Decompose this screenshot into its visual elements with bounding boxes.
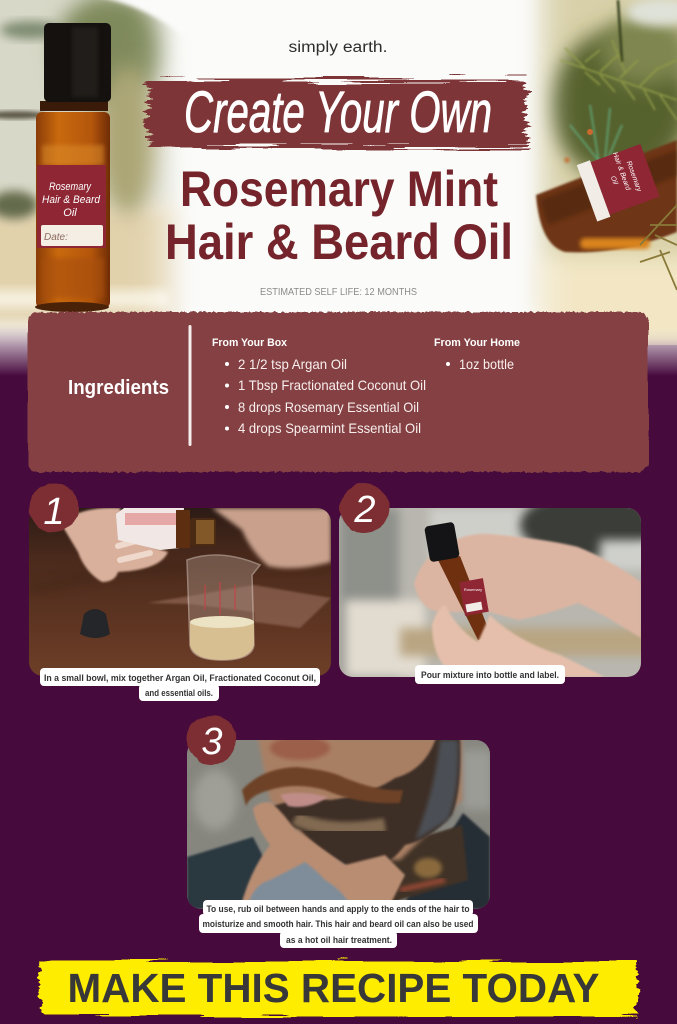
- badge: step 3: [188, 716, 236, 764]
- photo: step 1: [29, 508, 331, 676]
- badge: step 2: 2: [353, 489, 376, 531]
- jacket left: [187, 836, 263, 909]
- caption: step 3: as a hot oil hair treatment.: [286, 935, 392, 945]
- list: from your box: 8 drops Rosemary Essential Oil: [238, 399, 419, 415]
- badge: step 1: [30, 484, 78, 533]
- right hand: [212, 508, 331, 568]
- photo: left backdrop: [0, 0, 190, 325]
- left hand: [60, 508, 168, 582]
- title: [165, 161, 513, 270]
- photo: right bottle on its side: Rosemary: [625, 160, 642, 193]
- list: from your box: 1 Tbsp Fractionated Coconut Oil: [238, 377, 426, 393]
- list: from your home: [434, 337, 520, 372]
- jacket right: [400, 813, 490, 909]
- caption: step 3: [199, 900, 478, 948]
- divider: [188, 325, 192, 446]
- logo: simply earth: simply earth.: [288, 39, 388, 56]
- header photo area: [0, 0, 677, 400]
- title: Hair & Beard Oil: [165, 214, 513, 270]
- photo: step 3: [187, 736, 492, 909]
- beard highlights: [295, 818, 385, 829]
- beard grey side: [415, 740, 458, 840]
- essential oil bottle: [116, 508, 216, 550]
- photo: amber bottle: Oil: [63, 207, 77, 219]
- list: from your box: [212, 337, 426, 436]
- central white fade: [168, 0, 540, 400]
- moustache: [242, 767, 403, 806]
- roller bottle: Rosemary: [464, 587, 482, 592]
- list: from your box: 4 drops Spearmint Essential Oil: [238, 420, 421, 436]
- panel: ingredients: [28, 312, 648, 472]
- lower hand: [432, 605, 605, 677]
- caption: step 1: [40, 668, 320, 701]
- photo: right bottle on its side: Oil: [609, 175, 619, 186]
- lips: [280, 793, 328, 807]
- list: from your home: 1oz bottle: [459, 356, 514, 372]
- caption: step 1: In a small bowl, mix together Argan Oil, Fractionated Coconut Oil,: [44, 673, 316, 683]
- badge: step 3: 3: [201, 721, 223, 763]
- ingredients label: Ingredients: [68, 377, 169, 399]
- hand tattoo: [248, 862, 348, 900]
- caption: step 1: and essential oils.: [145, 688, 213, 698]
- list: from your box: From Your Box: [212, 337, 288, 349]
- photo: amber bottle: Rosemary: [49, 181, 92, 193]
- heading banner: Create Your Own: [148, 80, 526, 148]
- caption: step 3: To use, rub oil between hands and apply to the ends of the hair to: [206, 904, 470, 914]
- heading banner: Create Your Own: Create Your Own: [184, 80, 492, 145]
- list: from your home: From Your Home: [434, 337, 520, 349]
- photo: amber bottle: Date:: [44, 232, 68, 243]
- call to action banner: MAKE THIS RECIPE TODAY: [68, 965, 600, 1011]
- photo: amber bottle: [35, 23, 111, 312]
- caption: step 2: [415, 665, 565, 684]
- badge: step 1: 1: [43, 491, 65, 533]
- photo: right bottle on its side: Hair & Beard: [611, 151, 632, 192]
- hand: [240, 802, 405, 909]
- neck with tattoo: [390, 825, 468, 900]
- list: from your box: 2 1/2 tsp Argan Oil: [238, 356, 347, 372]
- badge: step 2: [340, 484, 389, 532]
- shelf life note: ESTIMATED SELF LIFE: 12 MONTHS: [260, 286, 417, 298]
- cap: [80, 609, 110, 638]
- beard: [274, 740, 462, 866]
- card on table: [147, 585, 331, 628]
- photo: amber bottle: Hair & Beard: [42, 194, 101, 206]
- photo: step 2: [339, 508, 641, 677]
- face: [258, 738, 462, 860]
- photo: right backdrop: [530, 0, 677, 345]
- photo: right bottle on its side: [536, 140, 677, 290]
- caption: step 2: Pour mixture into bottle and label.: [421, 670, 559, 680]
- upper hand: [414, 534, 641, 638]
- beaker: [187, 555, 260, 660]
- roller bottle: [424, 522, 491, 640]
- title: Rosemary Mint: [180, 161, 498, 217]
- caption: step 3: moisturize and smooth hair. This hair and beard oil can also be used: [202, 919, 474, 929]
